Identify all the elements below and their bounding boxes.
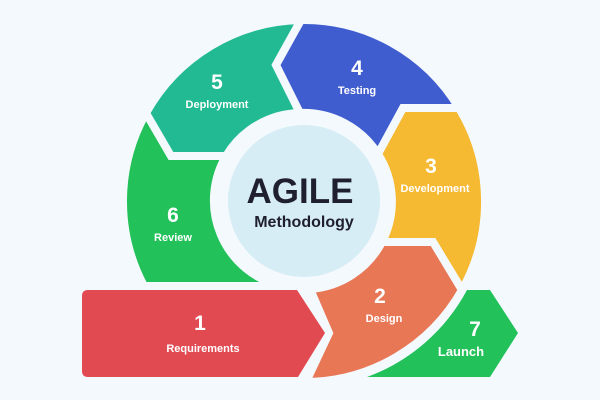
segment 4: Testing: 4: [351, 57, 363, 80]
segment 3: Development: Development: [400, 183, 470, 195]
segment 4: Testing: Testing: [338, 85, 376, 97]
segment 5: Deployment: [146, 20, 301, 156]
center circle: AGILE Methodology: [228, 125, 380, 277]
segment 2: Design: Design: [366, 313, 403, 325]
segment 5: Deployment: Deployment: [186, 99, 249, 111]
segment 3: Development: 3: [425, 155, 437, 178]
segment 5: Deployment: 5: [211, 71, 223, 94]
center circle: AGILE Methodology: Methodology: [254, 214, 354, 231]
center circle: AGILE Methodology: AGILE: [247, 172, 353, 211]
segment 6: Review: 6: [167, 204, 179, 227]
segment 7: Launch arrow: 7: [469, 318, 481, 341]
segment 2: Design: 2: [374, 285, 386, 308]
segment 2: Design: [306, 242, 462, 382]
segment 4: Testing: [276, 20, 459, 154]
segment 7: Launch arrow: Launch: [438, 344, 484, 359]
segment 1: Requirements arrow: Requirements: [166, 343, 240, 355]
segment 1: Requirements arrow: 1: [194, 312, 206, 335]
segment 3: Development: [378, 108, 485, 290]
segment 1: Requirements arrow: [82, 290, 325, 377]
segment 6: Review: Review: [154, 232, 192, 244]
segment 6: Review: [123, 113, 281, 286]
segment 7: Launch arrow: [367, 290, 518, 377]
